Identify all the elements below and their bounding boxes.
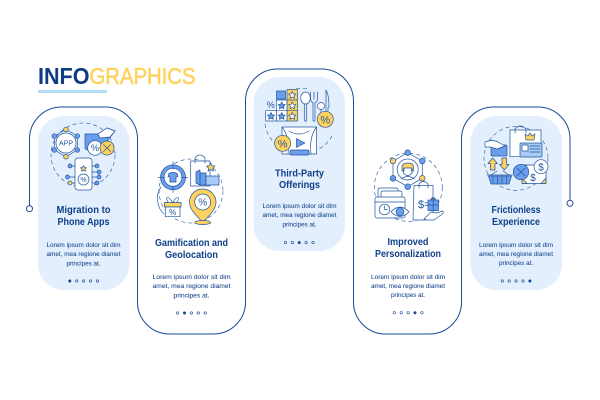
card 5 heading: Frictionless	[492, 204, 541, 216]
title: GRAPHICS	[90, 63, 196, 89]
icon: third-party offerings: %	[320, 114, 330, 126]
card 1 heading: Phone Apps	[58, 216, 110, 228]
card 4 body text	[371, 274, 445, 299]
title: INFO	[38, 63, 90, 89]
card 3 body text	[262, 203, 337, 228]
card 1 body text: amet, mea regione diamet	[46, 251, 121, 258]
title	[38, 63, 196, 93]
card 3 heading: Offerings	[279, 179, 320, 191]
card 5 heading: Experience	[492, 216, 540, 228]
card 5 body text	[479, 242, 553, 267]
icon: gamification and geolocation: %	[198, 198, 207, 208]
card 5 heading	[492, 204, 541, 228]
serpentine outline connecting the cards	[26, 69, 573, 334]
card 5 pagination dots	[501, 280, 531, 282]
icon: improved personalization	[374, 150, 443, 221]
card 3 body text: principes at.	[282, 222, 317, 228]
card 4 heading	[375, 236, 441, 260]
card 2 heading: Geolocation	[165, 249, 218, 261]
card 3 body text: amet, mea regione diamet	[262, 212, 337, 219]
icon: improved personalization: $=	[418, 199, 431, 211]
card 2 body text: amet, mea regione diamet	[152, 283, 231, 290]
icon: frictionless experience	[484, 126, 548, 190]
card 2 body text	[152, 274, 231, 300]
icon: migration to phone apps: APP	[59, 140, 73, 148]
card 3 pagination dots	[284, 241, 314, 244]
card 1 pagination dots	[69, 280, 99, 282]
light panel: card 1	[38, 116, 130, 290]
icon: frictionless experience: $	[538, 162, 544, 174]
icon: migration to phone apps	[51, 123, 115, 190]
icon: third-party offerings: %	[267, 100, 275, 110]
card 3 body text: Lorem ipsum dolor sit dim	[262, 203, 337, 210]
card 1 heading: Migration to	[56, 204, 110, 216]
card 2 pagination dots	[176, 312, 206, 314]
icon: migration to phone apps: %	[80, 177, 87, 184]
card 4 body text: Lorem ipsum dolor sit dim	[371, 274, 445, 281]
card 2 body text: Lorem ipsum dolor sit dim	[152, 274, 231, 281]
light panel: card 5	[470, 116, 562, 290]
card 1 body text: Lorem ipsum dolor sit dim	[46, 242, 121, 249]
card 4 body text: amet, mea regione diamet	[371, 283, 445, 290]
card 5 body text: amet, mea regione diamet	[479, 251, 553, 258]
card 2 heading	[155, 237, 228, 261]
card 4 heading: Improved	[388, 236, 428, 248]
card 2 body text: principes at.	[174, 292, 210, 300]
icon: frictionless experience: $	[530, 173, 536, 184]
card 4 heading: Personalization	[375, 248, 441, 260]
card 3 heading: Third-Party	[275, 168, 324, 180]
card 4 body text: principes at.	[391, 292, 425, 299]
card 1 body text	[46, 242, 121, 268]
card 3 heading	[275, 168, 324, 191]
card 1 body text: principes at.	[66, 260, 101, 268]
icon: third-party offerings	[265, 88, 333, 155]
card 4 pagination dots	[393, 312, 423, 314]
icon: gamification and geolocation: %	[169, 208, 176, 217]
icon: migration to phone apps: %	[91, 143, 99, 153]
card 5 body text: Lorem ipsum dolor sit dim	[479, 242, 553, 249]
light panel: card 3	[254, 77, 345, 251]
card 2 heading: Gamification and	[155, 237, 228, 249]
card 5 body text: principes at.	[499, 260, 533, 267]
card 1 heading	[56, 204, 110, 228]
icon: gamification and geolocation	[157, 155, 223, 224]
icon: third-party offerings: %	[278, 138, 288, 150]
